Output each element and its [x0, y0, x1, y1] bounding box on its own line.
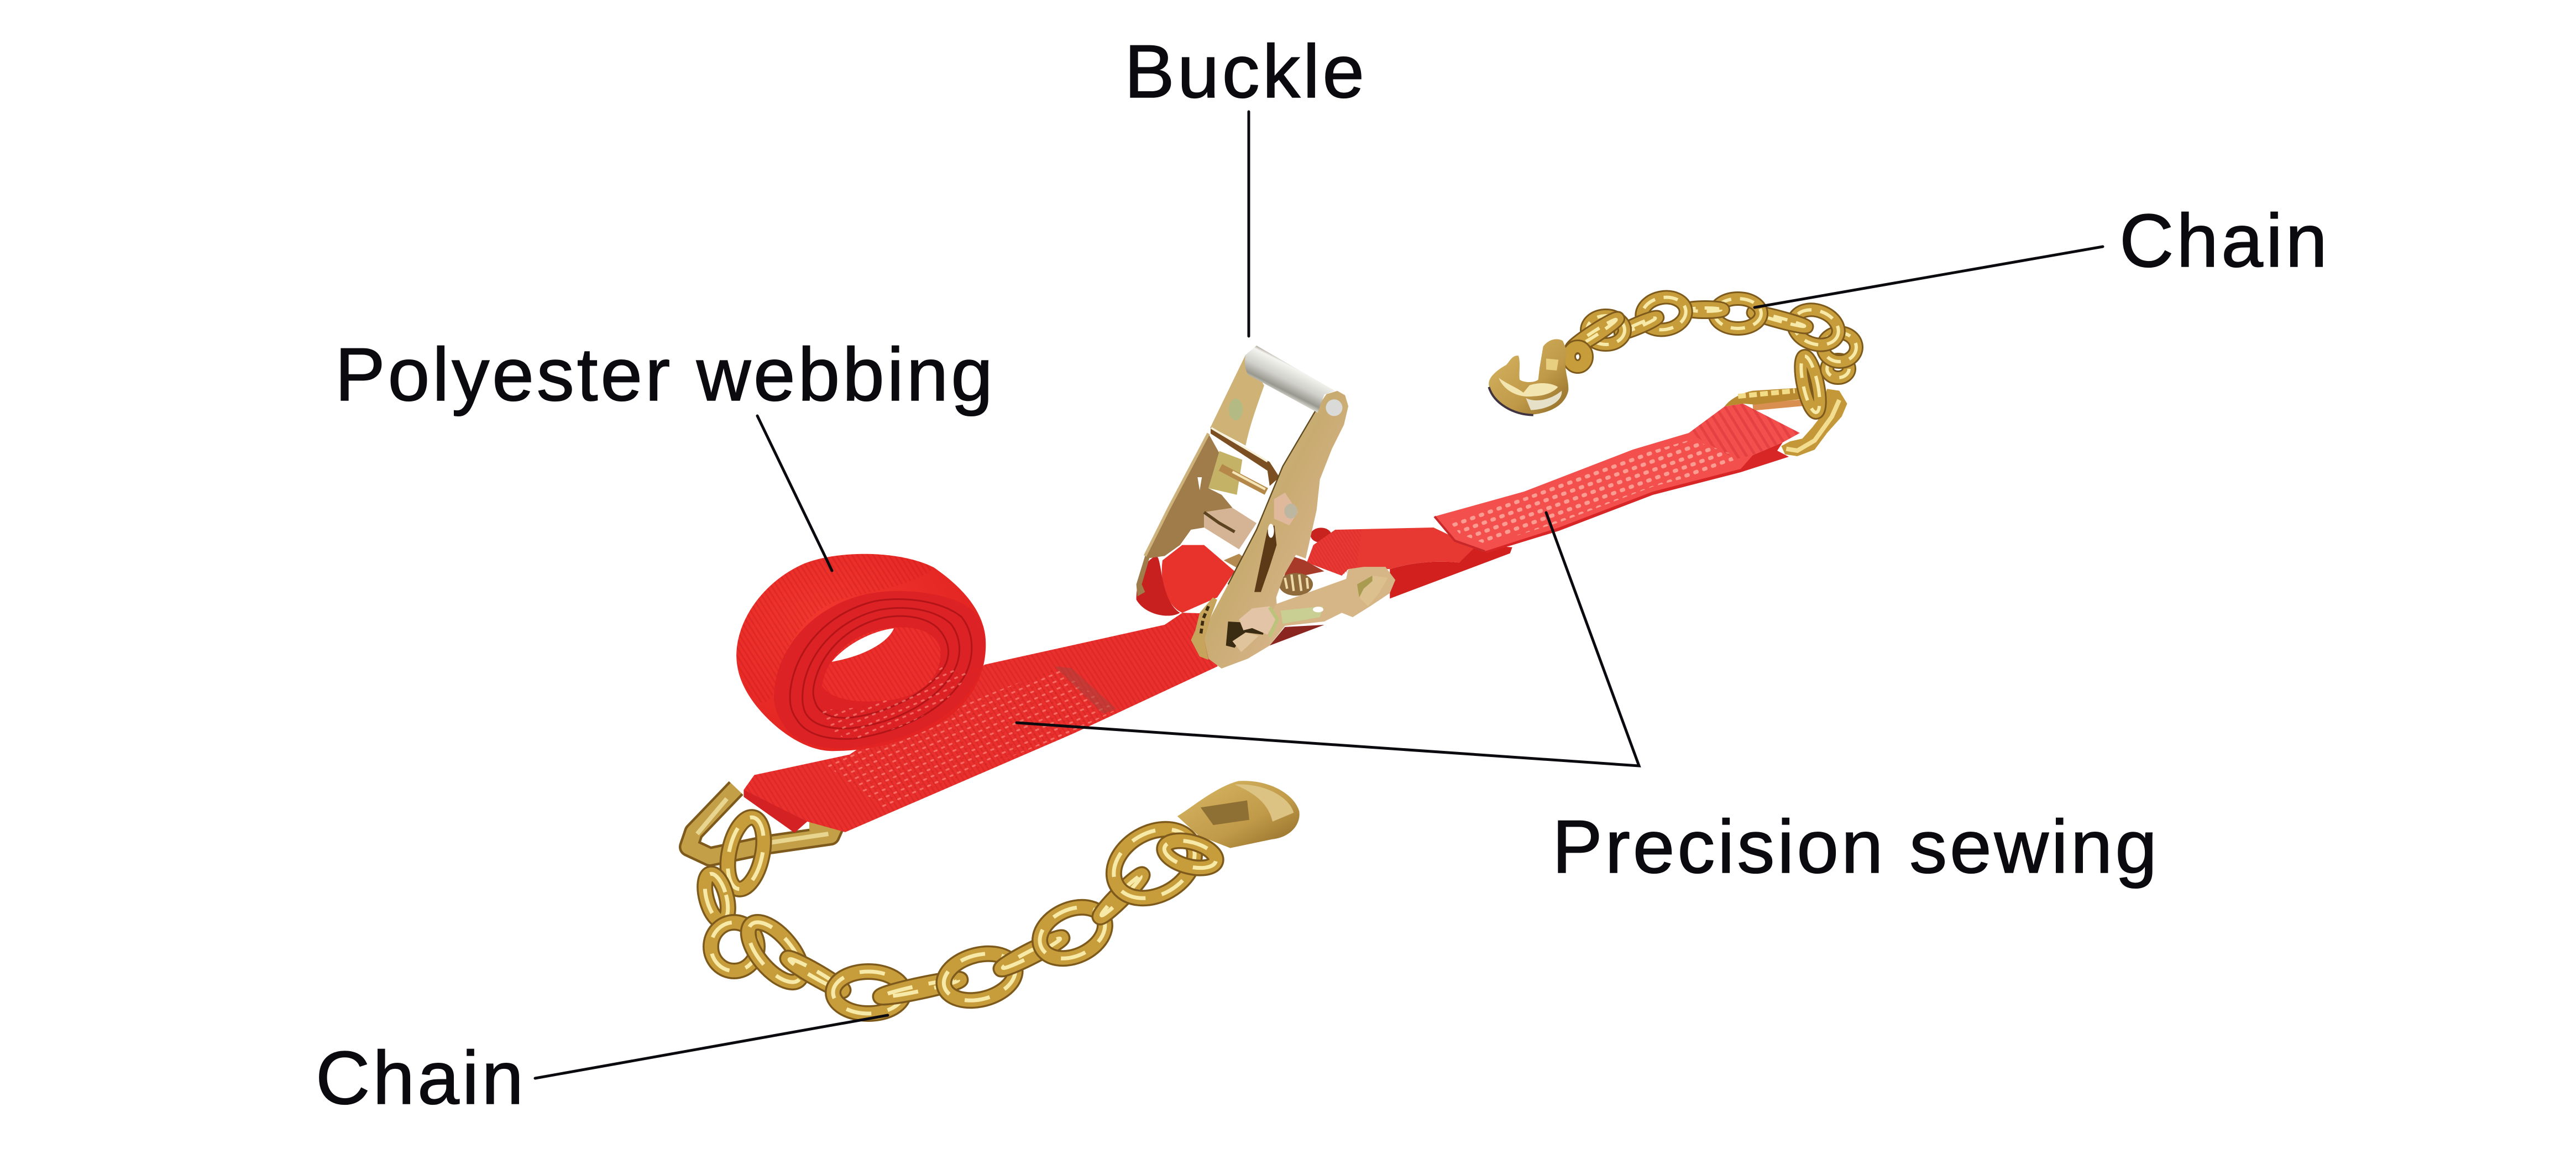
slider — [1208, 451, 1242, 495]
ribbed strap end — [1689, 404, 1800, 459]
callout: bottom Chain — [316, 1015, 888, 1120]
leader line — [1755, 247, 2103, 307]
label text: Chain — [316, 1036, 523, 1120]
far side plate — [1137, 434, 1233, 597]
product photo: ratchet strap — [689, 294, 1856, 1014]
ratchet buckle — [1137, 346, 1395, 669]
lower D-ring — [689, 788, 836, 857]
spring and inner link — [1283, 556, 1324, 580]
padded sewn section — [1485, 442, 1789, 554]
release bar — [1245, 346, 1335, 413]
rivets — [1326, 399, 1342, 416]
leader lines — [1017, 513, 1639, 766]
pawl — [1270, 567, 1395, 646]
cross slat — [1211, 427, 1280, 486]
upper chain with grab hook — [1489, 294, 1856, 456]
coil front face — [774, 591, 985, 748]
coil hole — [832, 628, 894, 662]
red spool — [1162, 545, 1235, 613]
coil inner wall — [822, 627, 941, 701]
strap section between buckle and padding — [1307, 528, 1512, 599]
main strap: lower section — [744, 613, 1218, 833]
hook body — [1489, 339, 1568, 415]
grab hook — [1177, 781, 1300, 848]
toothed wheel — [1191, 598, 1217, 660]
label text: Chain — [2119, 199, 2327, 283]
gear centre — [1226, 622, 1265, 648]
main strap: upper section — [1307, 404, 1800, 599]
leader line — [757, 416, 832, 571]
label text: Precision sewing — [1552, 805, 2157, 889]
leader line — [535, 1015, 888, 1078]
callout: Precision sewing — [1017, 513, 2157, 889]
hex bolt — [1357, 576, 1388, 606]
webbing coil — [736, 554, 986, 751]
lower tray — [1204, 508, 1256, 550]
stitched area — [826, 668, 1116, 807]
lower chain with grab hook — [689, 781, 1300, 1014]
coil outer surface — [736, 554, 986, 751]
stitching — [1448, 440, 1736, 545]
strap ribs — [744, 613, 1218, 833]
upper far arm — [1211, 355, 1264, 446]
label text: Polyester webbing — [335, 332, 993, 416]
callout: top Chain — [1755, 199, 2327, 307]
label text: Buckle — [1124, 29, 1364, 113]
leader line — [1247, 112, 1250, 336]
near plate — [1204, 391, 1348, 669]
upper D-ring — [1725, 388, 1847, 456]
strap body — [744, 613, 1218, 833]
callout: Polyester webbing — [335, 332, 993, 571]
slot — [1254, 525, 1276, 592]
